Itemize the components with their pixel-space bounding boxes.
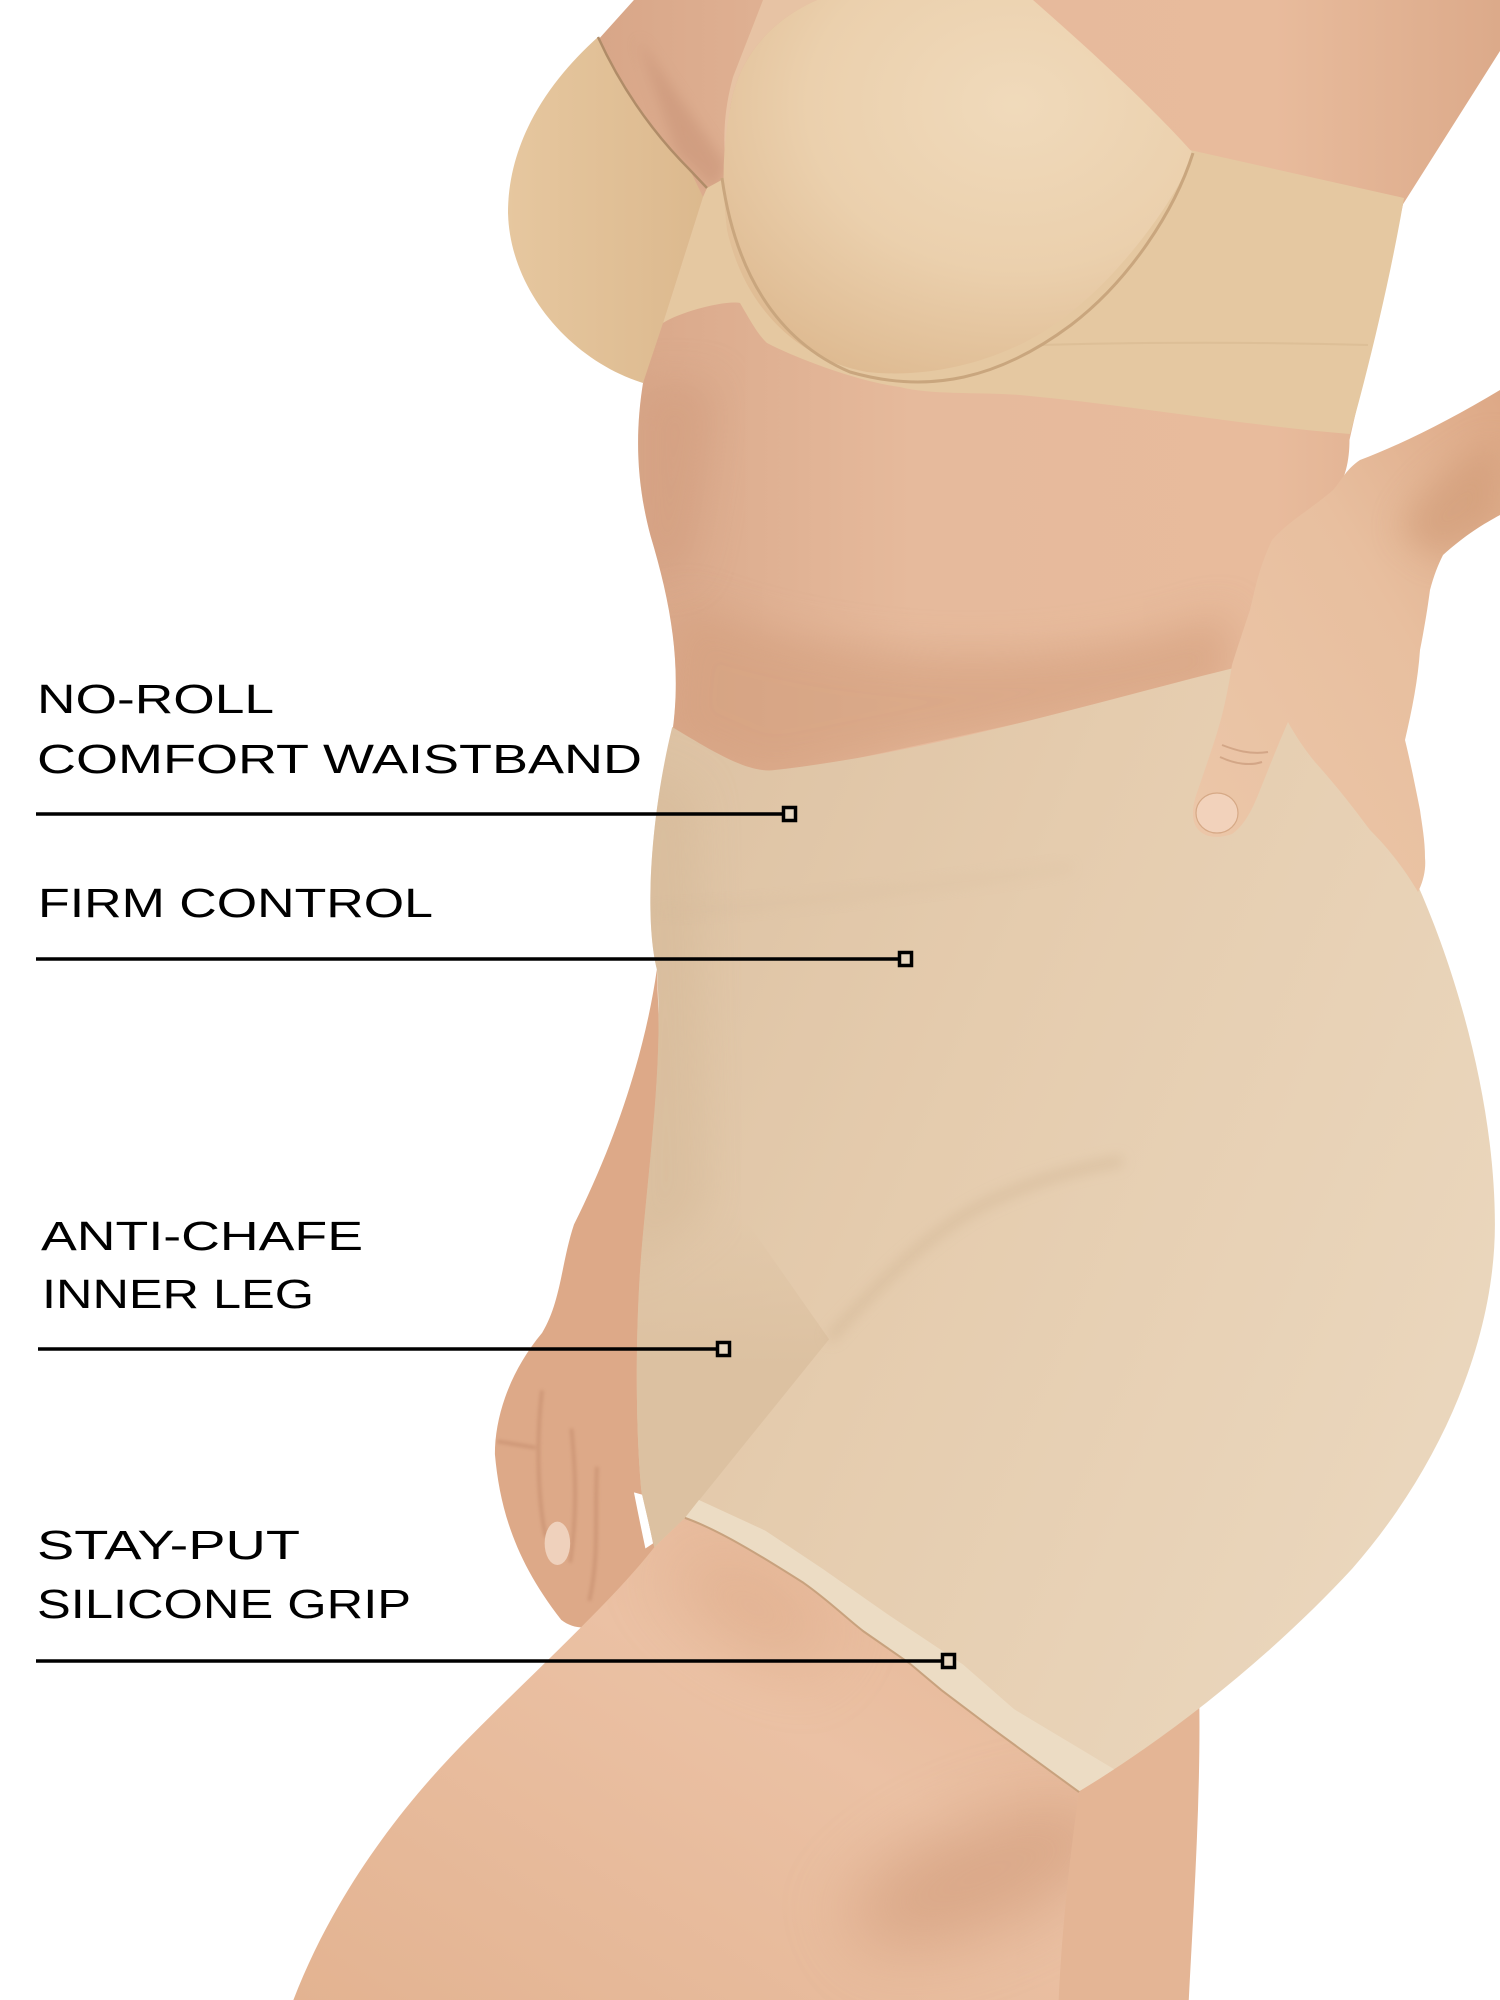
inner leg panel <box>637 1318 829 1546</box>
callout: no-roll comfort waistband <box>36 676 796 820</box>
hem band <box>685 1500 1116 1792</box>
finger shadow lines <box>497 1390 597 1601</box>
label text: FIRM CONTROL <box>38 880 433 926</box>
label text: COMFORT WAISTBAND <box>37 736 642 782</box>
leg shading near hem <box>852 1788 1078 1958</box>
lowered left arm and hand <box>495 969 663 1628</box>
shorts shading <box>625 765 1122 1792</box>
callout: anti-chafe inner leg <box>38 1213 730 1356</box>
bra strap seam <box>598 37 707 188</box>
bra band and side <box>663 150 1404 434</box>
callout: firm control <box>36 880 912 966</box>
thumbnail <box>1196 793 1238 833</box>
tummy to thigh fold shadow <box>829 1161 1122 1339</box>
bra main cup <box>724 0 1193 373</box>
waistband knit line <box>653 867 1071 912</box>
leader line with marker <box>36 808 796 820</box>
label text: STAY-PUT <box>37 1522 300 1568</box>
shapewear shorts <box>625 667 1495 1792</box>
leader line with marker <box>36 1654 954 1668</box>
callout: stay-put silicone grip <box>36 1522 954 1668</box>
near leg <box>293 1518 1132 2000</box>
label text: ANTI-CHAFE <box>41 1213 363 1259</box>
label text <box>37 676 642 782</box>
thumb creases <box>1220 745 1268 764</box>
fingernail <box>545 1522 570 1565</box>
label text <box>41 1213 363 1317</box>
cleavage skin strip <box>724 0 817 177</box>
white gap between finger and shorts <box>634 1492 653 1548</box>
figure: skin behind garments <box>495 0 1500 2000</box>
torso shading <box>638 38 1231 784</box>
left bra cup <box>508 37 703 383</box>
hem edge line <box>685 1518 1079 1792</box>
raised right arm and hand <box>1193 390 1500 892</box>
wrist shading <box>1404 456 1500 558</box>
label text: NO-ROLL <box>37 676 274 722</box>
torso skin <box>599 0 1500 816</box>
far leg <box>1046 1684 1199 2000</box>
label text <box>37 1522 411 1627</box>
lower band knit line <box>1040 343 1368 345</box>
label text: SILICONE GRIP <box>37 1581 411 1627</box>
cup underwire seam <box>722 153 1193 382</box>
leader line with marker <box>38 1342 730 1356</box>
leader line with marker <box>36 952 912 966</box>
label text: INNER LEG <box>42 1271 314 1317</box>
